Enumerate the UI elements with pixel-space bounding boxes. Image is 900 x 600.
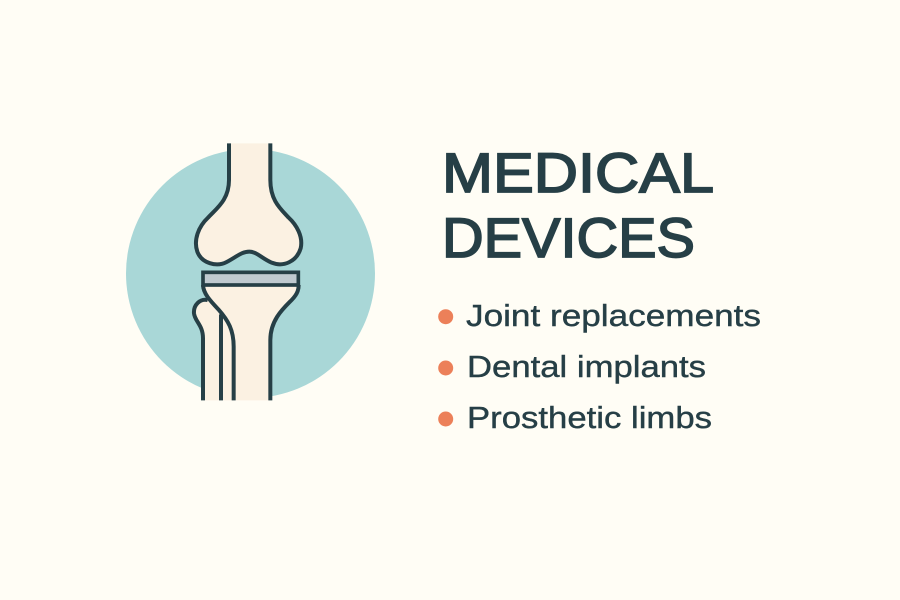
bullet list	[438, 298, 761, 435]
list item: joint replacements: Joint replacements	[466, 298, 761, 333]
tibia outline	[203, 285, 299, 400]
icon: knee joint implant	[126, 143, 375, 400]
title: MEDICAL	[442, 141, 714, 204]
knee bones	[194, 143, 301, 400]
lower bones fill	[194, 285, 299, 400]
title	[442, 141, 714, 269]
femur	[196, 143, 301, 264]
teal background circle	[126, 149, 375, 398]
implant tray	[203, 272, 298, 285]
list item: prosthetic limbs: Prosthetic limbs	[467, 400, 712, 435]
list item: dental implants: Dental implants	[467, 349, 706, 384]
title: DEVICES	[442, 206, 695, 269]
fibula outline	[194, 300, 221, 400]
